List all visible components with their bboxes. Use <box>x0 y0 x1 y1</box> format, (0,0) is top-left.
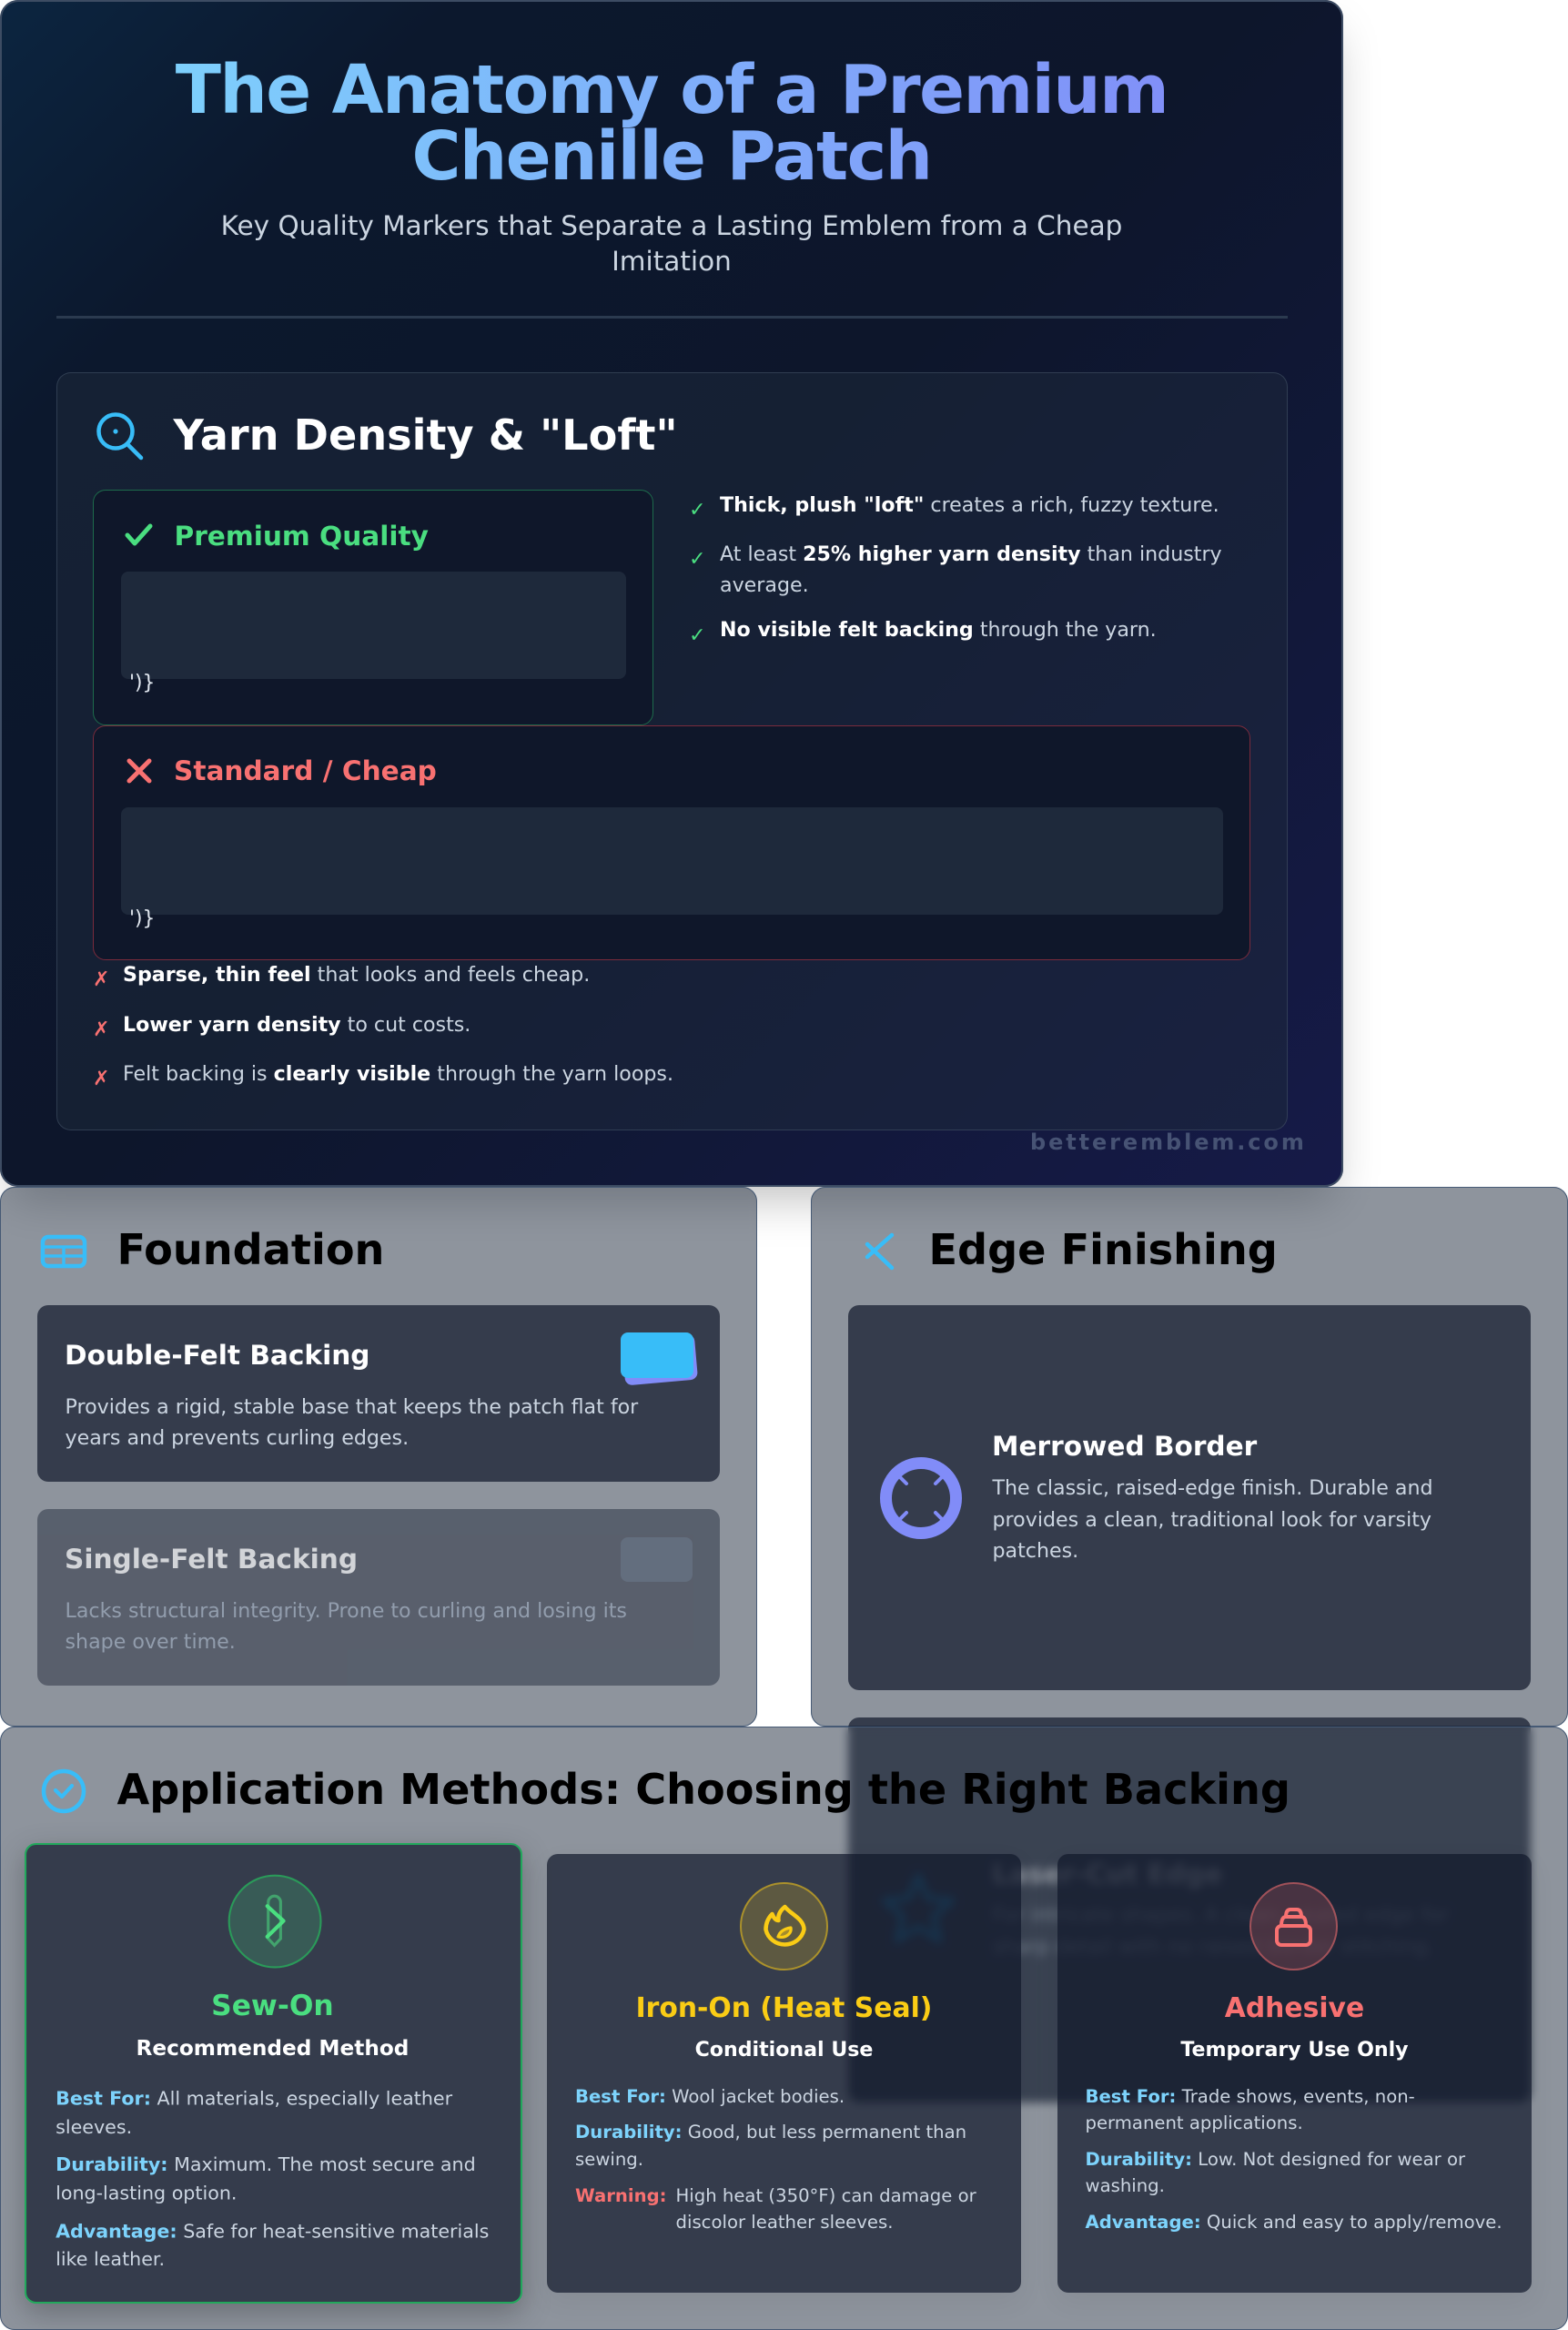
list: cheap points <box>93 963 673 1090</box>
point 2: At least 25% higher yarn density than industry average. <box>720 542 1222 597</box>
image placeholder <box>120 572 626 679</box>
list: premium points <box>689 493 1222 646</box>
list: cheap points: ✗ <box>93 1018 110 1041</box>
heading: Single-Felt Backing <box>65 1544 358 1575</box>
details: Durability: Maximum. The most secure and long-lasting option. <box>56 2154 476 2204</box>
point 2: Lower yarn density to cut costs. <box>123 1013 470 1037</box>
watermark: betteremblem.com <box>1030 1130 1307 1155</box>
point 1: Sparse, thin feel that looks and feels cheap. <box>123 963 590 987</box>
details: Best For: Wool jacket bodies. <box>575 2086 845 2106</box>
heading: Sew-On <box>211 1990 334 2022</box>
title: Chenille Patch <box>411 118 932 195</box>
card: sew-on <box>25 1843 522 2304</box>
icon: needle <box>228 1874 321 1968</box>
icon: cross stitch <box>865 1232 894 1271</box>
details: Warning: <box>575 2185 667 2206</box>
icon: magnifier <box>96 412 144 461</box>
point 3: Felt backing is clearly visible through the yarn loops. <box>123 1061 673 1085</box>
heading: Merrowed Border <box>992 1431 1257 1462</box>
details <box>56 2088 489 2271</box>
card: iron-on <box>547 1854 1021 2293</box>
details: High heat (350°F) can damage or discolor leather sleeves. <box>676 2185 976 2233</box>
heading: application methods: Application Methods: Choosing the Right Backing <box>116 1765 1290 1814</box>
description: sharp detail with no raised border stitching. <box>992 1935 1433 1959</box>
description: For intricate shapes. A clean, sealed edge for <box>992 1903 1449 1927</box>
heading: standard cheap: Standard / Cheap <box>174 755 437 786</box>
heading: Double-Felt Backing <box>65 1340 369 1371</box>
icon: red cross <box>127 759 151 783</box>
panel: premium quality <box>93 490 653 725</box>
icon: green check <box>126 524 153 546</box>
panel: foundation <box>0 1187 757 1727</box>
icon: flame <box>740 1882 828 1970</box>
title <box>118 56 1225 189</box>
panel: edge finishing <box>811 1187 1568 1727</box>
subheading: Recommended Method <box>137 2036 409 2061</box>
details: Advantage: Safe for heat-sensitive materials like leather. <box>56 2220 489 2271</box>
panel: yarn density and loft <box>56 372 1288 1130</box>
stray text: ')} <box>129 907 155 930</box>
heading: premium quality: Premium Quality <box>175 521 429 552</box>
icon: star <box>883 1875 954 1942</box>
list: premium points: ✓ <box>689 623 706 646</box>
details: Best For: All materials, especially leather sleeves. <box>56 2088 452 2138</box>
main panel: yarn density header card <box>0 0 1343 1187</box>
card: adhesive <box>1057 1854 1532 2293</box>
list: cheap points: ✗ <box>93 967 110 991</box>
card: single felt backing <box>37 1509 720 1686</box>
details: Durability: Good, but less permanent than sewing. <box>575 2122 966 2170</box>
heading: Iron-On (Heat Seal) <box>636 1992 932 2024</box>
list: cheap points: ✗ <box>93 1067 110 1090</box>
stray text: ')} <box>129 672 155 694</box>
subheading: Temporary Use Only <box>1180 2038 1409 2062</box>
image placeholder <box>120 806 1223 914</box>
heading: Adhesive <box>1225 1992 1364 2024</box>
icon: single layer <box>621 1537 693 1582</box>
icon: glue jar <box>1249 1882 1338 1970</box>
description: The classic, raised-edge finish. Durable and provides a clean, traditional look for varsity patches. <box>992 1476 1433 1563</box>
card: double felt backing <box>37 1305 720 1482</box>
details: Best For: Trade shows, events, non-permanent applications. <box>1085 2086 1415 2133</box>
card: merrowed border <box>848 1305 1531 1690</box>
details <box>575 2086 976 2233</box>
description: Lacks structural integrity. Prone to curling and losing its shape over time. <box>66 1598 627 1654</box>
icon: felt layers <box>621 1332 697 1385</box>
panel: standard cheap <box>93 725 1250 960</box>
heading: foundation: Foundation <box>116 1225 384 1274</box>
details: Advantage: Quick and easy to apply/remove. <box>1085 2212 1502 2233</box>
list: premium points: ✓ <box>689 547 706 571</box>
subheading: Conditional Use <box>695 2038 873 2062</box>
subtitle: Imitation <box>612 246 732 277</box>
details <box>1085 2086 1502 2233</box>
icon: merrowed ring <box>880 1457 962 1539</box>
description: Provides a rigid, stable base that keeps the patch flat for years and prevents curling edges. <box>66 1394 638 1450</box>
point 3: No visible felt backing through the yarn. <box>720 618 1157 642</box>
card: laser cut edge <box>848 1717 1531 2102</box>
details: Durability: Low. Not designed for wear or washing. <box>1085 2149 1465 2196</box>
icon: layers table <box>40 1234 87 1269</box>
panel: application methods <box>0 1727 1568 2330</box>
point 1: Thick, plush "loft" creates a rich, fuzzy texture. <box>720 493 1219 517</box>
list: premium points: ✓ <box>689 498 706 522</box>
heading: yarn density: Yarn Density & "Loft" <box>173 410 678 459</box>
subtitle: Key Quality Markers that Separate a Lasting Emblem from a Cheap <box>221 210 1122 241</box>
subtitle <box>221 210 1122 277</box>
description <box>992 1903 1449 1959</box>
icon: check circle <box>42 1769 86 1813</box>
heading: edge finishing: Edge Finishing <box>928 1225 1278 1274</box>
heading: Laser-Cut Edge <box>992 1859 1222 1889</box>
title: The Anatomy of a Premium <box>176 51 1168 129</box>
